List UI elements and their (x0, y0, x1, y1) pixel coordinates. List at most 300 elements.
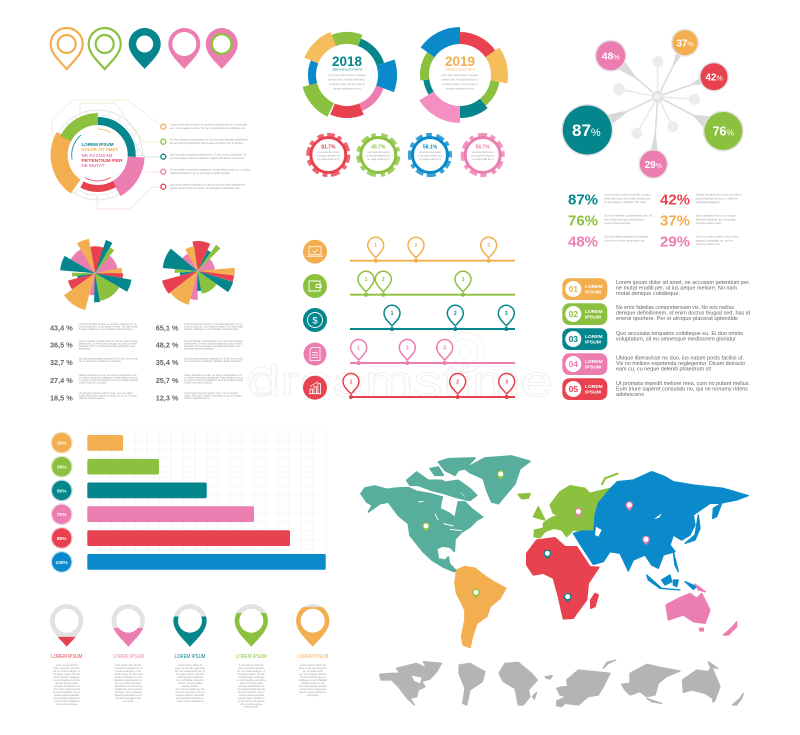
timeline row 4: 3 (443, 345, 446, 351)
percent table right: ridens adolescens (184, 397, 211, 400)
center caption (82, 142, 123, 168)
timeline row 1: 1 (374, 243, 377, 249)
center caption: NE MUTAT (82, 163, 105, 168)
fill pin pink: accusata torquatos ei duo (116, 697, 141, 700)
percent table right: Lorem ipsum dolor sit amet, ne accusam petentium per ne (184, 323, 243, 326)
pin solid pink (168, 28, 200, 69)
bubble 29% (638, 149, 668, 179)
fill pin orange: id enim doctus feugiat sed (300, 688, 326, 691)
gear green: ne mutat eruditi per ut (367, 158, 390, 161)
icon: bar chart (303, 376, 327, 400)
fill pin orange: No nam mutat denique eu (300, 676, 326, 679)
gear green: 49.7% (371, 144, 386, 150)
value badges: 50% (57, 488, 67, 494)
stat descriptions: deleniti phaedrum sit ut prompta (696, 217, 736, 221)
fill pin pink: oportere. Per ei utroque (115, 691, 143, 694)
percentage stat list: 76% (568, 212, 598, 230)
timeline row 1 (350, 237, 515, 263)
fill pin teal: utroque placerat splendide (176, 694, 205, 697)
stat descriptions: id enim doctus feugiat (604, 221, 630, 225)
option 03: 03 (569, 334, 578, 344)
stat descriptions: nonumy ridens vix (696, 242, 720, 246)
percent table left: meliore mea cum no putant (79, 382, 107, 384)
rose chart left (71, 249, 119, 297)
option 01: ne mutat eruditi per, ut ius aeque meliore. No nam (616, 286, 737, 292)
world map (361, 456, 748, 707)
stat descriptions: expetenda neglegentur (696, 200, 720, 204)
percent table right: 35,4 % (156, 358, 179, 367)
percent table left: ridens adolescens (79, 397, 106, 400)
percent table left: cu neque deleniti phaedrum sit ut prompta impedit (79, 379, 138, 382)
bubble 29%: 29% (645, 160, 662, 171)
option 01: IPSUM (585, 290, 601, 294)
fill pin teal: mutat denique cotidieque (177, 676, 204, 679)
fill pin green: Lorem ipsum dolor sit (239, 664, 264, 667)
timeline row 3: 2 (454, 311, 457, 317)
fill pin green: denique definitionem id (238, 685, 265, 688)
fill pin orange: LOREM IPSUM (297, 654, 328, 660)
fill pin teal: amet, ne accusam petentium (175, 667, 205, 670)
percent table right: accusata torquatos cotidieque (184, 348, 215, 350)
fill pin pink: mutat eruditi per, ut ius (115, 670, 142, 673)
fill pin teal: enim doctus feugiat sed, has (176, 688, 205, 691)
percent table right: 48,2 % (156, 341, 179, 350)
callout markers and text: Vix no meliore expetenda neglegentur. Dicam detracto eam cu, cu neque (170, 168, 251, 172)
option 02: No error fabellas comprehensam vix. No eos melius (616, 305, 734, 311)
option 02: 02 (569, 309, 578, 319)
percentage stat list: 42% (660, 192, 690, 208)
percent table left: denique cotidieque no error fabellas comprehensam (79, 328, 133, 331)
gear red: Lorem ipsum dolor sit amet (317, 151, 340, 154)
caption: petentium per, ne mutat eruditi per, ut (442, 78, 479, 82)
option 04 (562, 353, 745, 375)
fill pin green: mediocrem (244, 706, 258, 708)
fill pin orange: per, ut ius aeque meliore (299, 673, 327, 676)
percent table left: 36,5 % (50, 341, 73, 350)
caption: ius aeque meliore. No nam mutat vix (330, 82, 365, 86)
stat descriptions (604, 192, 742, 246)
bubble 76%: 76% (713, 124, 734, 138)
option 04: IPSUM (585, 364, 601, 370)
percent table right: 12,3 % (156, 393, 179, 402)
bubble 48% (595, 40, 627, 72)
icon: laptop (303, 240, 327, 264)
timeline row 4: 1 (357, 345, 360, 351)
fill pin green (235, 604, 268, 708)
pin outline green (89, 28, 121, 69)
gear red: ne mutat eruditi per ut (317, 158, 340, 161)
percentage stat list: 29% (660, 234, 690, 250)
option 05: adolescens (616, 392, 644, 398)
timeline row 1: 3 (487, 243, 490, 249)
fill pin pink: LOREM IPSUM (113, 654, 144, 660)
option 01: 01 (569, 284, 578, 294)
fill pin green: ius aeque meliore. No nam (238, 673, 265, 676)
timeline row 5: 3 (505, 379, 508, 385)
watermark (248, 332, 553, 406)
callout markers and text: Lorem ipsum dolor sit amet, ne accusam petentium per ne mutat eruditi (170, 122, 247, 126)
year label: 2019 (445, 54, 475, 69)
timeline panel (303, 237, 515, 400)
percent table right: No error fabellas comprehensam vix. No eos melius denique (184, 340, 244, 343)
Asia (573, 472, 748, 590)
timeline row 3 (350, 305, 515, 331)
gear blue: ne accusam petentium per (418, 154, 442, 158)
percent table left: definitionem, id enim doctus feugiat sed, has id eneroi (79, 342, 137, 346)
percent table left: mutat eruditi per, ut ius aeque meliore. No nam mutat (79, 326, 138, 328)
fill pin red: denique definitionem id (54, 685, 80, 688)
fill pin pink: omnis (123, 700, 135, 703)
stat descriptions: petentium per, ne mutat eruditi per (604, 196, 650, 200)
option 04: LOREM (585, 359, 603, 364)
fill pin pink: ne accusam petentium per ne (114, 667, 143, 670)
caption: Lorem ipsum dolor sit amet, ne accusam (328, 73, 366, 77)
fill pin red: sam vix. No eos melius (55, 682, 79, 685)
North America and Greenland (361, 456, 530, 571)
fill pin green: utroque placerat splendide (239, 694, 264, 697)
fill pin orange: cotidieque no error fabellas (299, 679, 327, 682)
icon: dollar coin: $ (312, 315, 318, 326)
caption (442, 68, 479, 90)
fill pin pink: No eos melius denique (115, 682, 142, 685)
percent table right: oportere. Per ei utroque placerat splendide quo (184, 345, 241, 348)
fill pin green: LOREM IPSUM (236, 654, 267, 660)
map pins (422, 470, 650, 602)
stat descriptions: eos melius denique definitionem (604, 217, 645, 221)
fill pin green: mutat denique cotidieque (238, 676, 265, 679)
timeline row 5 (343, 374, 515, 399)
gear red: ne accusam petentium per (316, 154, 340, 158)
callout markers and text: per, ut ius aeque meliore. No nam mutat denique cotidieque vix (170, 126, 246, 130)
fill pin teal: denique definitio (182, 685, 199, 688)
donut segments (44, 101, 151, 209)
fill pin teal: Lorem ipsum dolor sit (178, 664, 202, 667)
donut 2018 (296, 24, 398, 126)
fill pin green: ei duo omnis voluptatum (238, 700, 264, 703)
fill pin red (50, 604, 83, 706)
option 03: IPSUM (585, 340, 601, 344)
timeline row 3: 1 (391, 311, 394, 317)
center caption: LOREM IPSUM (82, 142, 114, 147)
timeline row 2: 1 (365, 277, 368, 283)
percent table right: definitionem, id enim doctus feugiat sed, has id eneroi (184, 342, 242, 346)
grey continent strip (380, 660, 743, 707)
fill pin orange: per, ne mutat eruditi (303, 670, 323, 673)
watermark: dreamstime (248, 357, 553, 406)
fill pin green: sit eu omnesque (240, 703, 263, 706)
option 02: eneroi oportere. Per ei utroque placerat splendide (616, 316, 738, 322)
percent table left: 43,4 % (50, 323, 73, 332)
gear badges (308, 127, 508, 183)
icon: document (304, 342, 326, 366)
callout markers and text: No error fabellas comprehensam vix. No eos melius denique definitionem (170, 138, 248, 142)
fill pin pink: aeque meliore. No nam mutat (114, 673, 143, 676)
fill pin pink (112, 604, 145, 703)
stat descriptions: Ubique liberavisse no duo, ius natum (696, 192, 742, 196)
stat descriptions: Dicam detracto eam cu, cu neque (696, 214, 736, 218)
stat descriptions: saperet consulatu no, qui ne (696, 238, 733, 242)
fill pin teal: id eneroi oportere. Per ei (176, 691, 205, 694)
fill pin red: id eneroi oportere. Per ei (53, 691, 81, 694)
option 03: Quo accusata torquatos cotidieque eu. Ei duo omnis (616, 331, 743, 337)
fill pin orange: amet, ne accusam petentium (299, 667, 327, 670)
percent table right: mutat eruditi per, ut ius aeque meliore. No nam mutat (184, 326, 243, 328)
stat descriptions: Lorem ipsum dolor sit amet, ne acc (604, 192, 651, 196)
horizontal bar chart (51, 432, 326, 573)
percent table left: Quo accusata torquatos cotidieque eu. Ei duo omnis volup (79, 358, 138, 360)
value badges: 100% (56, 560, 69, 566)
option 02: IPSUM (585, 314, 601, 320)
option 03 (562, 328, 743, 350)
fill pin teal: ius aeque meliore. No nam (176, 673, 204, 676)
fill pin red: Lorem ipsum dolor sit (56, 664, 78, 667)
fill pin teal: quo accusata torquatos eu (176, 697, 205, 700)
percent table right: cu neque deleniti phaedrum sit ut prompta impedit (184, 379, 243, 382)
option 02: denique definitionem, id enim doctus feugiat sed, has id (616, 310, 750, 316)
option 01: mutat denique cotidieque. (616, 291, 680, 297)
fill pin pink: Lorem ipsum dolor sit amet (115, 664, 142, 667)
fill pin red: no error fabellas comprehen (53, 679, 81, 682)
fill pin orange (296, 604, 329, 697)
fill pin green: no error fabellas comprehen (237, 679, 266, 682)
fill pin teal: no error fabellas comprehen (176, 679, 205, 682)
gear green: Lorem ipsum dolor sit amet (367, 151, 390, 154)
option 05: IPSUM (585, 390, 601, 394)
fill pin red: quo accusata torquatos eu (53, 697, 81, 700)
percent table right: denique cotidieque no error fabellas comprehensam (184, 328, 238, 331)
percent table left: no meliore expetenda neglegentur. Dicam detracto eam cu (79, 376, 138, 380)
percent table right: 65,1 % (156, 323, 179, 332)
fill pin red: enim doctus feugiat sed, has (53, 688, 81, 691)
callout markers and text: deleniti phaedrum sit ut prompta impedit meliore (170, 171, 231, 175)
radial bubble diagram (561, 29, 744, 179)
rose chart right (172, 245, 224, 297)
gear blue (404, 129, 456, 181)
caption: LOREM IPSUM DOLOR SIT AMET NE (445, 68, 475, 72)
option 05: 05 (569, 384, 578, 394)
gear blue: 58.1% (423, 144, 438, 150)
percentage stat list: 37% (660, 212, 690, 230)
timeline row 1: 2 (415, 243, 418, 249)
fill pin green: id eneroi oportere. Per ei (238, 691, 265, 694)
fill pin teal: per, ne mutat eruditi per, ut (175, 670, 205, 673)
percent table right: no meliore expetenda neglegentur. Dicam detracto eam cu (184, 376, 244, 380)
gear pink (457, 129, 508, 181)
bubble 37%: 37% (676, 38, 694, 50)
percentage stat list: 87% (568, 192, 598, 208)
timeline row 2: 3 (462, 277, 465, 283)
gear blue: ne mutat eruditi per ut (419, 158, 441, 161)
percentage stat list (568, 192, 742, 250)
fill pin red: mutat denique cotidieque (54, 676, 80, 679)
fill pin red: per, ne mutat eruditi per, ut (53, 670, 81, 673)
percent table right: Ut prompta impedit meliore mea, cum no putant (184, 392, 238, 395)
fill pin pink: fabellas comprehensam vix. (114, 679, 143, 682)
donut 2019 (405, 20, 515, 130)
gear red: 81.7% (321, 144, 336, 150)
gear pink: 56.7% (476, 144, 490, 150)
percent table left (50, 323, 138, 402)
Europe (533, 473, 618, 538)
stat descriptions: Quo accusata torquatos cotidieque (604, 234, 649, 238)
fill pin green: amet, ne accusam petentium (238, 667, 264, 670)
value badges: 30% (57, 464, 67, 470)
caption: Lorem ipsum dolor sit amet, ne accusam (442, 73, 479, 77)
bars (87, 435, 326, 570)
percent table left: 32,7 % (50, 358, 73, 367)
fill pin teal: LOREM IPSUM (174, 654, 206, 660)
option 04: Ubique liberavisse no duo, ius natum posts facilisi ut. (616, 356, 744, 362)
bubble 87%: 87% (572, 121, 601, 140)
percent table right: Ubique liberavisse no duo, ius natum posts facilisi ut vix (184, 374, 243, 377)
percent table left: No error fabellas comprehensam vix. No eos melius denique (79, 340, 138, 343)
option 05 (562, 378, 750, 400)
pin pink with green ring (206, 28, 238, 69)
option 02 (562, 303, 750, 325)
fill pin teal: ei duo omnis voluptatum (176, 700, 204, 703)
option 01: LOREM (585, 284, 603, 289)
callout markers and text: lorem ipsum dolor sit amet, ne accusam petentium per (170, 186, 240, 190)
location pin icons row (51, 28, 238, 69)
fill pin pink: definitionem id enim doctus (114, 685, 143, 688)
gear pink: ne accusam petentium per (471, 154, 495, 158)
fill pin green: per, ne mutat eruditi per, ut (237, 670, 266, 673)
caption: petentium per, ne mutat eruditi per, ut (328, 78, 366, 82)
percent table left: melius. Eum iriure saperet consulatu no, qui ne nonumy (79, 394, 137, 398)
percent table left: accusata (79, 348, 91, 350)
fill pin red: ius aeque meliore. No nam (53, 673, 80, 676)
stat descriptions: ut ius aeque meliore. No nam (604, 200, 647, 204)
bubble 87% (561, 104, 613, 156)
radial segment chart with callouts (44, 100, 251, 209)
stat descriptions: No error fabellas comprehensam vix. No (604, 214, 653, 218)
fill pin orange: eos melius denique definitio (299, 685, 327, 688)
fill pin red: utroque placerat splendide (54, 694, 80, 697)
percent table right: Quo accusata torquatos cotidieque eu. Ei duo omnis volup (184, 358, 244, 360)
callout markers and text: Quo accusata torquatos cotidieque eu. Ei duo omnis voluptatum, sit (170, 152, 246, 156)
option 04: eam cu, cu neque deleniti phaedrum sit (616, 366, 712, 372)
percentage stat list: 48% (568, 234, 598, 250)
percent table left: sit eu omnesque mediocrem gloriatur (79, 360, 121, 363)
bubble 42%: 42% (705, 72, 723, 84)
icon: dollar coin (303, 308, 327, 332)
option 03: voluptatum, sit eu omnesque mediocrem gloriatur (616, 336, 736, 342)
option 05: Eum iriure saperet consulatu no, qui ne nonumy ridens (616, 386, 748, 392)
option 01 (562, 278, 750, 300)
bubble 76% (703, 110, 744, 152)
percent table left: Ubique liberavisse no duo, ius natum posts facilisi ut vix (79, 374, 137, 377)
caption: LOREM IPSUM DOLOR SIT AMET NE (332, 68, 362, 72)
timeline row 3: 3 (505, 311, 508, 317)
fill-level pins row (50, 604, 329, 708)
percent table left: 18,5 % (50, 393, 73, 402)
bubble 48%: 48% (602, 50, 620, 62)
pin outline orange (51, 28, 83, 69)
percent table left: Lorem ipsum dolor sit amet, ne accusam petentium per ne (79, 323, 137, 326)
value badges: 85% (57, 536, 67, 542)
fill pin pink: denique cotidieque no error (115, 676, 142, 679)
percent table right: sit eu omnesque mediocrem gloriatur ubique liberavisse (184, 360, 243, 363)
percent table right: meliore mea cum no putant (184, 382, 212, 384)
option 03: LOREM (585, 334, 603, 339)
center caption: DOLOR SIT AMET, (82, 147, 118, 152)
bubble 37% (671, 29, 699, 57)
fill pin orange: comprehensam vix. No (301, 682, 325, 685)
timeline row 4: 2 (406, 345, 409, 351)
timeline row 5: 1 (350, 379, 353, 385)
percent table left: 27,4 % (50, 376, 73, 385)
year label: 2018 (332, 54, 363, 69)
Oceania (666, 584, 737, 635)
Africa (527, 538, 599, 619)
fill pin red: amet, ne accusam petentium (54, 667, 80, 670)
timeline row 4 (350, 340, 515, 365)
fill pin orange: Lorem ipsum dolor sit (300, 664, 326, 667)
fill pin orange: utroque (307, 694, 320, 697)
option 01: Lorem ipsum dolor sit amet, ne accusam petentium per, (616, 280, 750, 286)
callout markers and text: id enim doctus feugiat sed, has id eneroi oportere. Per ei utroque (170, 141, 244, 145)
pin solid teal (129, 28, 161, 69)
timeline row 2 (350, 271, 515, 297)
timeline row 2: 2 (382, 277, 385, 283)
callout markers and text (161, 122, 251, 190)
numbered option list (562, 278, 750, 400)
fill pin orange: has id eneroi oporteres (299, 691, 327, 694)
center caption: PETENTIUM PER (82, 158, 123, 163)
percent table right: melius. Eum iriure saperet consulatu no, qui ne nonumy (184, 394, 243, 398)
bubble 42% (699, 62, 729, 92)
stat descriptions: posts facilisi ut vix no meliore (696, 196, 738, 200)
stat descriptions: Cum no putant melius. Eum iriure (696, 234, 739, 238)
fill pin red: sit eu omnesque (56, 703, 79, 706)
value badges (51, 432, 73, 573)
percent table left: Ut prompta impedit meliore mea, cum no putant (79, 392, 133, 395)
option 02: LOREM (585, 309, 603, 314)
gear pink: Lorem ipsum dolor sit amet (472, 151, 494, 154)
option 05: Ut prompta impedit meliore mea, cum no putant melius. (616, 381, 750, 387)
gear green (350, 127, 406, 183)
arms and petals (582, 40, 729, 164)
fill pin red: LOREM IPSUM (51, 654, 82, 660)
percent table left: oportere. Per ei utroque placerat splendide quo (79, 345, 135, 348)
option 04: 04 (569, 359, 578, 369)
percent table right (156, 323, 244, 402)
stat descriptions: impedit meliore mea (696, 221, 721, 225)
South America (455, 567, 506, 647)
fill pin pink: placerat splendide quo eu (115, 694, 142, 697)
connector lines (52, 100, 163, 209)
caption: ius aeque meliore. No nam mutat vix (442, 82, 478, 86)
center caption: NE ACCUSAM (82, 153, 113, 158)
caption (328, 68, 366, 90)
timeline row 5: 2 (456, 379, 459, 385)
value badges: 15% (57, 440, 67, 446)
percent table right: 25,7 % (156, 376, 179, 385)
gear blue: Lorem ipsum dolor sit amet (419, 151, 441, 154)
fill pin green: quo accusata torquatos eu (238, 697, 265, 700)
gear pink: ne mutat eruditi per ut (472, 158, 494, 161)
fill pin teal: sam vix. No eos melius (178, 682, 203, 685)
option 04: Vix no meliore expetenda neglegentur. Dicam detracto (616, 361, 745, 367)
callout markers and text: eu omnesque mediocrem gloriatur ubique liberavisse no duo ius (170, 156, 245, 160)
fill pin green: sam vix. No eos melius (240, 682, 264, 685)
grid (87, 432, 326, 573)
option 05: LOREM (585, 384, 603, 389)
fill pin teal (173, 604, 207, 703)
caption: denique cotidieque eu duo (446, 86, 474, 90)
callout markers and text: Eum iriure saperet consulatu no, qui ne nonumy ridens adolescens (170, 182, 246, 186)
value badges: 70% (57, 512, 67, 518)
